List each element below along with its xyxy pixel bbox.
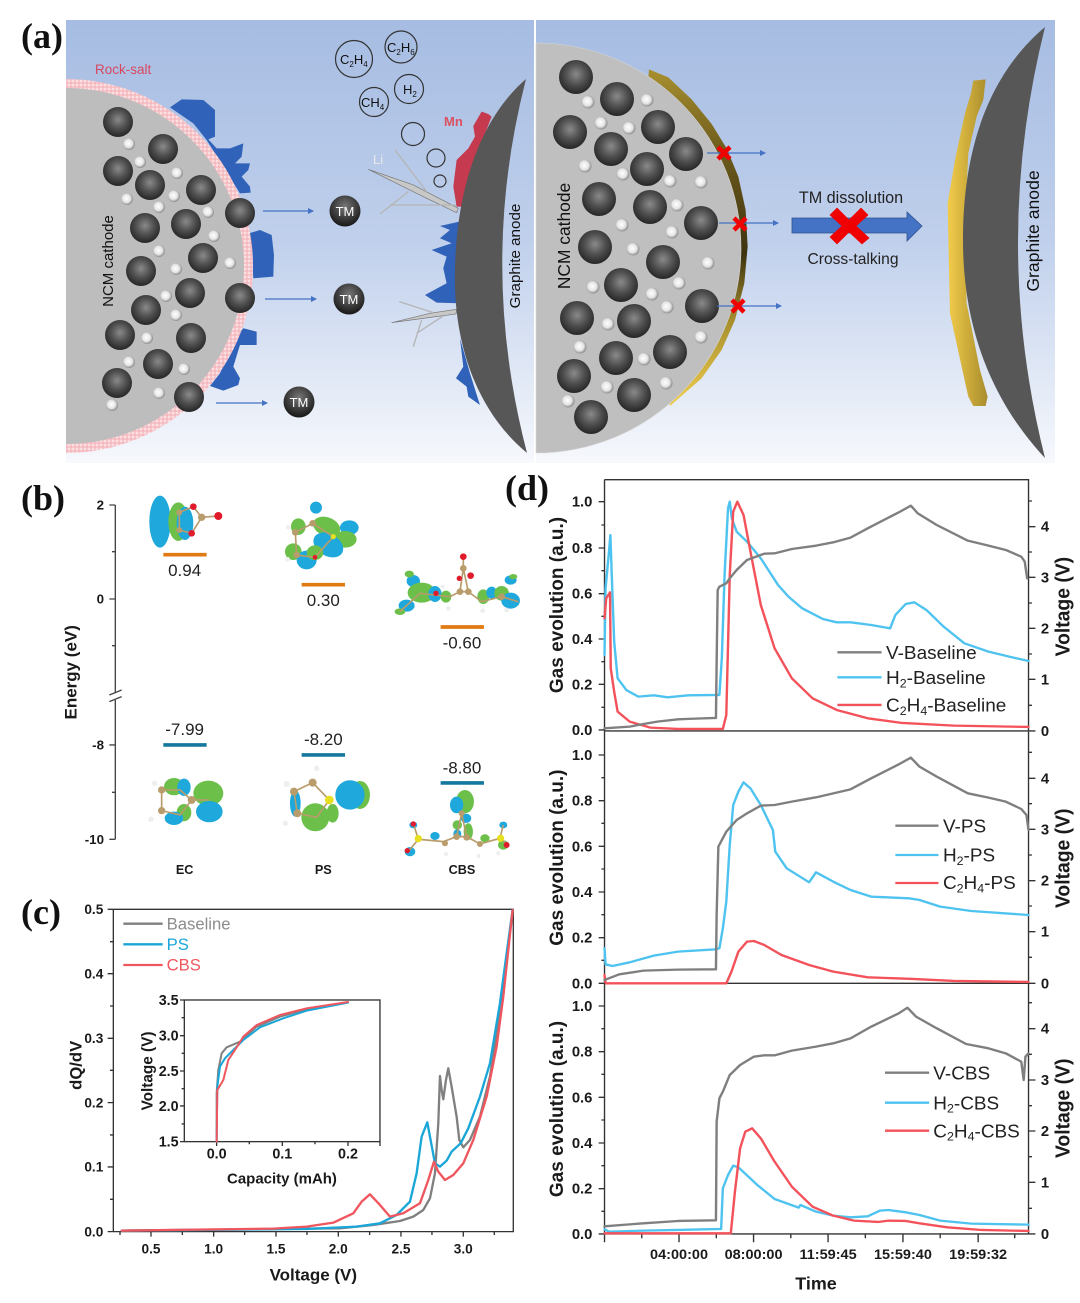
frame and ticks	[599, 480, 1035, 731]
NCM cathode label: NCM cathode	[100, 215, 117, 307]
energy values: -8.80	[443, 758, 481, 777]
gas bubbles: H	[403, 82, 412, 97]
y tick labels	[84, 902, 104, 1239]
energy values: -7.99	[165, 720, 204, 739]
gold CEI on cathode	[635, 69, 748, 406]
legend: H	[943, 845, 957, 866]
left tick labels: 1.0	[572, 748, 592, 764]
H2 curve	[605, 782, 1029, 966]
C2H4 curve	[605, 502, 1029, 729]
TM dissolution label: TM dissolution	[799, 189, 903, 207]
y tick labels: 0.0	[84, 1224, 104, 1239]
gas bubbles	[336, 31, 446, 187]
inset chart: Capacity (mAh)	[227, 1170, 337, 1187]
axis titles: Gas evolution (a.u.)	[546, 770, 568, 946]
inset chart: 2.0	[159, 1099, 179, 1115]
axis title: Energy (eV)	[62, 625, 81, 720]
dissolved TM ions: TM	[336, 204, 354, 219]
LUMO level bars	[163, 555, 484, 627]
legend: 2	[947, 1102, 954, 1116]
panel d bottom: CBS gas evolution	[546, 983, 1075, 1293]
left tick labels	[572, 748, 593, 992]
left tick labels: 0.0	[572, 1227, 592, 1243]
gas bubbles: 4	[380, 103, 385, 112]
panel label (b): (b)	[21, 478, 65, 518]
right tick labels: 2	[1041, 622, 1049, 637]
energy values: -0.60	[443, 634, 481, 653]
time tick labels: 19:59:32	[949, 1247, 1007, 1263]
panel label (c): (c)	[21, 892, 61, 932]
energy axis: 2	[97, 498, 104, 513]
energy axis: -10	[85, 832, 104, 847]
inset chart: 3.0	[159, 1029, 179, 1045]
TM migration arrows	[216, 211, 316, 403]
x tick labels	[141, 1241, 473, 1256]
energy axis: -8	[92, 738, 104, 753]
left tick labels: 0.4	[572, 1136, 593, 1152]
panel label (a): (a)	[21, 16, 63, 56]
right tick labels	[1041, 772, 1050, 992]
legend: -PS	[964, 845, 995, 866]
legend: 2	[900, 704, 907, 718]
legend: PS	[167, 935, 189, 954]
left tick labels: 1.0	[572, 999, 592, 1015]
legend: 4	[968, 1130, 975, 1144]
left tick labels: 1.0	[572, 495, 592, 511]
gas bubbles: 2	[349, 60, 354, 69]
NCM cathode body	[66, 88, 244, 444]
legend: 2	[947, 1130, 954, 1144]
panel b: orbital energy diagram	[62, 496, 520, 877]
right tick labels: 2	[1041, 1124, 1049, 1140]
PS LUMO orbital	[285, 502, 359, 569]
right tick labels: 4	[1041, 520, 1050, 536]
x tick labels: 1.0	[204, 1241, 224, 1256]
legend: V-CBS	[933, 1063, 990, 1083]
y tick labels: 0.3	[84, 1031, 104, 1046]
left tick labels: 0.8	[572, 794, 592, 810]
legend: CBS	[167, 956, 201, 975]
inset chart	[140, 993, 380, 1187]
inset chart: 0.0	[207, 1147, 227, 1163]
frame and ticks	[599, 983, 1035, 1242]
legend: C	[886, 695, 900, 716]
energy values	[165, 561, 481, 777]
gas bubbles: H	[354, 52, 363, 67]
blocked TM arrows	[707, 153, 781, 306]
lithium dendrites	[368, 150, 458, 347]
panel d top: Baseline gas evolution: Voltage (V)	[1052, 557, 1075, 656]
time tick labels: 11:59:45	[799, 1247, 857, 1263]
left tick labels: 0.2	[572, 1182, 592, 1198]
inset chart: 0.2	[338, 1147, 358, 1163]
right tick labels	[1041, 1022, 1050, 1243]
x axis title: Time	[795, 1274, 837, 1293]
left tick labels: 0.6	[572, 1091, 592, 1106]
gas bubbles: 4	[363, 60, 368, 69]
left tick labels: 0.6	[572, 587, 592, 603]
EC LUMO orbital	[149, 496, 222, 548]
legend: -PS	[984, 872, 1016, 893]
chart frame and ticks	[108, 909, 513, 1237]
legend: 4	[977, 882, 984, 895]
x tick labels: 2.0	[329, 1241, 348, 1256]
energy values: -8.20	[304, 730, 343, 749]
TM particles right	[553, 60, 719, 434]
graphite anode	[455, 79, 527, 453]
legend: C	[933, 1121, 947, 1141]
right tick labels: 4	[1041, 772, 1050, 787]
left tick labels: 0.0	[572, 977, 592, 992]
inset chart: 2.5	[159, 1064, 179, 1080]
legend	[885, 1063, 1020, 1144]
dissolved TM ions: TM	[340, 292, 358, 307]
time tick labels: 15:59:40	[874, 1247, 932, 1263]
CBS curve	[122, 910, 513, 1231]
blue CEI deposits	[170, 99, 274, 391]
gas bubbles: H	[401, 40, 410, 55]
gas bubbles: C	[387, 40, 396, 55]
H2 curve	[605, 502, 1029, 697]
x tick labels: 0.5	[141, 1241, 161, 1256]
Cross-talking label: Cross-talking	[808, 251, 898, 268]
left tick labels: 0.8	[572, 541, 592, 557]
right tick labels: 0	[1041, 977, 1049, 992]
legend: H	[886, 667, 900, 688]
HOMO level bars	[163, 745, 484, 783]
legend: 2	[957, 854, 964, 868]
voltage curve	[605, 506, 1027, 728]
legend: H	[964, 872, 977, 893]
frame and ticks	[599, 732, 1035, 983]
Graphite anode label: Graphite anode	[507, 204, 524, 308]
x tick labels: 2.5	[391, 1241, 411, 1256]
voltage curve	[605, 1008, 1029, 1226]
Graphite anode label: Graphite anode	[1023, 170, 1043, 292]
legend: -Baseline	[927, 695, 1006, 716]
gold SEI on anode	[948, 79, 988, 406]
energy values: 0.30	[307, 591, 340, 610]
x tick labels: 1.5	[266, 1241, 286, 1256]
left tick labels: 0.6	[572, 840, 592, 855]
H2 curve	[605, 1166, 1029, 1232]
Rock-salt label: Rock-salt	[95, 62, 152, 77]
panel d middle: PS gas evolution: Voltage (V)	[1052, 809, 1075, 908]
rock-salt layer	[66, 79, 253, 453]
legend: H	[933, 1093, 947, 1113]
right tick labels: 4	[1041, 1022, 1050, 1038]
big blue arrow	[792, 212, 922, 241]
inset chart: 3.5	[159, 993, 179, 1009]
y tick labels: 0.2	[84, 1095, 104, 1110]
gas bubbles: CH	[361, 95, 380, 110]
molecule names: EC	[176, 863, 193, 877]
legend: 4	[920, 704, 927, 718]
x axis title: Voltage (V)	[270, 1265, 357, 1284]
legend: V-Baseline	[886, 642, 977, 663]
left tick labels	[572, 495, 593, 739]
right tick labels: 3	[1041, 1073, 1049, 1089]
legend: -CBS	[954, 1093, 999, 1113]
small particles right	[562, 94, 714, 408]
legend: H	[907, 695, 920, 716]
panel d bottom: CBS gas evolution: Voltage (V)	[1052, 1059, 1075, 1158]
legend: C	[943, 872, 957, 893]
CBS HOMO orbital	[405, 790, 510, 858]
EC HOMO orbital	[148, 778, 223, 825]
axis titles: Gas evolution (a.u.)	[546, 517, 568, 693]
legend: -Baseline	[907, 667, 986, 688]
inset chart: 0.1	[272, 1147, 292, 1163]
NCM cathode body	[536, 43, 741, 453]
Mn label: Mn	[444, 114, 463, 129]
panel a left: unprotected cell	[66, 20, 534, 463]
right tick labels: 2	[1041, 874, 1049, 890]
TM particles left	[102, 107, 255, 412]
legend	[895, 816, 1016, 895]
right tick labels: 3	[1041, 571, 1049, 586]
legend: H	[954, 1121, 968, 1141]
panel label (d): (d)	[505, 468, 549, 508]
energy values: 0.94	[168, 561, 201, 580]
gas bubbles: 2	[396, 48, 401, 57]
right tick labels	[1041, 520, 1050, 740]
left tick labels: 0.2	[572, 931, 592, 947]
y tick labels: 0.4	[84, 966, 104, 981]
time tick labels: 08:00:00	[725, 1247, 783, 1263]
energy axis	[85, 498, 122, 847]
left tick labels: 0.4	[572, 632, 593, 648]
left tick labels: 0.2	[572, 678, 592, 693]
left tick labels: 0.0	[572, 723, 592, 739]
small particles left	[106, 138, 236, 411]
inset chart: 1.5	[159, 1135, 179, 1151]
molecule names: PS	[315, 863, 332, 877]
right tick labels: 1	[1041, 925, 1049, 941]
time tick labels: 04:00:00	[650, 1247, 708, 1263]
Baseline curve	[122, 910, 513, 1231]
y axis title: dQ/dV	[66, 1041, 85, 1090]
Mn deposit	[453, 112, 492, 207]
legend: Baseline	[167, 914, 231, 933]
legend	[123, 914, 231, 975]
molecule names: CBS	[449, 863, 475, 877]
panel a right: protected cell	[536, 20, 1055, 463]
CBS LUMO orbital	[395, 553, 520, 615]
PS curve	[122, 910, 513, 1231]
blue SEI on anode	[425, 222, 480, 405]
axis titles: Gas evolution (a.u.)	[546, 1021, 568, 1197]
dissolved TM ions: TM	[290, 395, 308, 410]
panel d middle: PS gas evolution	[546, 732, 1075, 992]
Li label: Li	[373, 152, 383, 167]
gas bubbles: C	[340, 52, 349, 67]
x tick labels: 3.0	[454, 1241, 473, 1256]
y tick labels: 0.5	[84, 902, 104, 917]
gas bubbles: 6	[410, 48, 415, 57]
right tick labels: 1	[1041, 673, 1049, 688]
y tick labels: 0.1	[84, 1160, 104, 1175]
legend: 2	[900, 677, 907, 690]
time tick labels	[650, 1247, 1007, 1263]
C2H4 curve	[605, 1128, 1029, 1233]
small red crosses	[718, 147, 746, 312]
right tick labels: 1	[1041, 1176, 1049, 1191]
C2H4 curve	[605, 941, 1029, 983]
gas bubbles: 2	[412, 90, 417, 99]
legend	[837, 642, 1006, 718]
right tick labels: 0	[1041, 1227, 1049, 1243]
molecule names	[176, 863, 475, 877]
NCM cathode label: NCM cathode	[554, 183, 574, 289]
panel d top: Baseline gas evolution	[546, 480, 1075, 740]
legend: V-PS	[943, 816, 986, 836]
left tick labels: 0.4	[572, 885, 593, 901]
inset chart: Voltage (V)	[140, 1032, 157, 1110]
right tick labels: 3	[1041, 823, 1049, 838]
right tick labels: 0	[1041, 724, 1049, 740]
graphite anode	[963, 27, 1045, 458]
panel c: dQ/dV chart	[66, 902, 513, 1284]
voltage curve	[605, 758, 1029, 980]
left tick labels: 0.8	[572, 1045, 592, 1061]
legend: -CBS	[975, 1121, 1020, 1141]
left tick labels	[572, 999, 593, 1243]
legend: 2	[957, 882, 964, 895]
dissolved TM ions	[284, 196, 364, 418]
PS HOMO orbital	[283, 766, 370, 831]
big red cross	[831, 209, 868, 243]
energy axis: 0	[97, 592, 104, 607]
